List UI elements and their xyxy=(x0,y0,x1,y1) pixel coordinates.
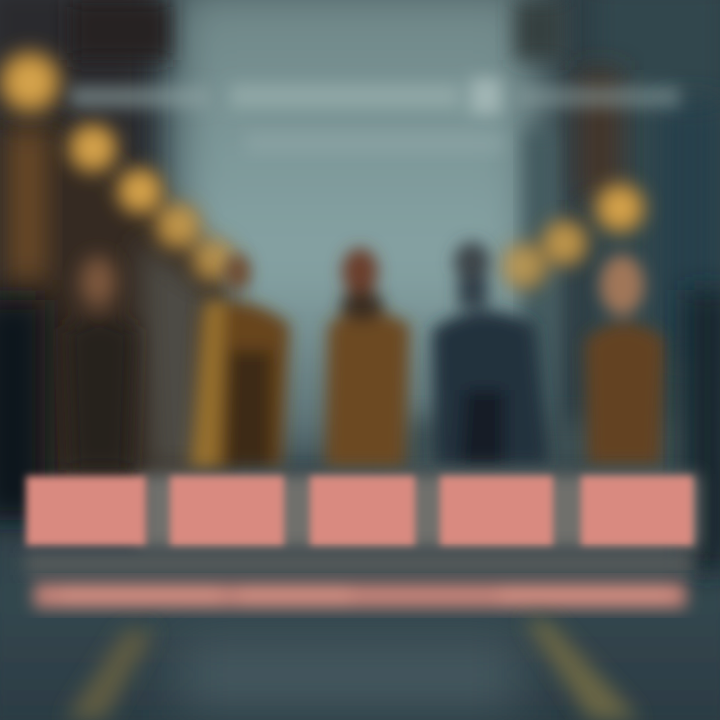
title: blurred text band xyxy=(70,78,680,114)
figure: navy coat xyxy=(432,242,548,465)
figure: far right xyxy=(685,290,720,570)
lamps: left string xyxy=(0,40,243,290)
figure: second from left xyxy=(65,256,135,470)
floor markings xyxy=(65,620,640,720)
lamps: right string xyxy=(493,174,654,298)
subtitle: blurred text band xyxy=(245,132,505,154)
panel backing behind pink boxes xyxy=(140,474,700,548)
panel row: five pink boxes xyxy=(26,476,693,546)
figure: brown coat right xyxy=(585,255,665,465)
figure: far left xyxy=(0,300,45,520)
figure: brown coat centre xyxy=(325,248,410,468)
pink strip xyxy=(34,583,686,608)
figure: brown coat left xyxy=(190,254,290,468)
divider band xyxy=(25,553,693,575)
